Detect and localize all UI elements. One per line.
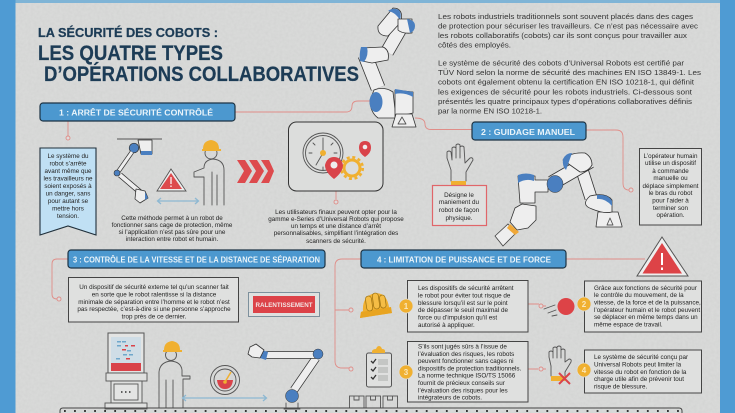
text box: section 2 description	[640, 148, 702, 225]
heading: section 4	[361, 250, 566, 268]
panel: point 3: dispositifs de protection traditionnels.	[418, 365, 522, 372]
icon: large warning triangle	[637, 237, 688, 276]
panel: point 2: 2	[582, 300, 587, 309]
arrow: separation distance	[182, 395, 266, 401]
heading: section 2: 2 : GUIDAGE MANUEL	[481, 128, 575, 137]
callout: physical handling	[432, 186, 486, 226]
text box: section 2 description: utilise un dispositif	[645, 160, 696, 167]
text: section 1 right: Les utilisateurs finaux peuvent opter pour la	[275, 209, 397, 216]
panel: point 4: Le système de sécurité conçu par	[594, 354, 688, 361]
intro text: TÜV Nord selon la norme de sécurité des machines EN ISO 13849-1. Les	[438, 68, 701, 77]
icon: speed gauge	[210, 366, 240, 394]
icon: map pins	[325, 141, 371, 179]
text: section 1 left: interaction entre robot et humain.	[126, 236, 218, 243]
text: section 1 right	[268, 209, 404, 245]
panel: point 2: se déplacer en même temps dans un	[594, 314, 698, 321]
icon: speed robot	[248, 344, 323, 409]
ribbon: section 1 description: Le système du	[48, 153, 89, 160]
intro text: de protection pour sécuriser les travailleurs. Ce n’est pas nécessaire avec	[438, 22, 698, 30]
icon: hand with cuff	[447, 144, 473, 186]
sign: ralentissement: RALENTISSEMENT	[256, 302, 313, 309]
panel: point 3: l’évaluation des risques, les robots	[418, 351, 514, 358]
icon: ceiling robot	[114, 139, 162, 203]
icon: main robot arm	[360, 8, 416, 127]
ribbon: section 1 description: les travailleurs ne	[44, 176, 93, 182]
text box: section 2 description: manuelle ou	[653, 175, 688, 182]
title: LA SÉCURITÉ DES COBOTS :	[38, 25, 218, 40]
panel: point 2: vitesse, de la force et de la puissance,	[594, 300, 701, 306]
text box: section 2 description: L’opérateur humain	[644, 153, 698, 160]
panel: point 1: le robot pour éviter tout risque de	[418, 292, 511, 300]
icon: hand with red cross	[549, 346, 571, 384]
callout: physical handling: maniement du	[439, 199, 479, 206]
intro text: les exigences de sécurité pour les robots industriels. Ci-dessous sont	[438, 88, 692, 96]
arrow: distance worker robot	[158, 198, 198, 204]
heading: section 4: 4 : LIMITATION DE PUISSANCE ET DE FORCE	[377, 256, 552, 264]
text box: section 3 description: minimale de séparation entre l’homme et le robot n’est	[78, 299, 230, 306]
panel: point 3: fournit de précieux conseils sur	[418, 380, 505, 387]
text: section 1 left: fonctionner sans cage de protection, même	[112, 222, 233, 229]
panel: point 4: vitesse du robot en fonction de la	[594, 369, 687, 376]
ribbon: section 1 description: pour autant se	[48, 198, 89, 205]
text box: section 3 description: trop près de ce dernier.	[122, 314, 187, 320]
text: section 1 right: gamme e-Series d’Universal Robots qui propose	[268, 216, 404, 223]
icon: control kiosk	[105, 333, 147, 409]
ribbon: section 1 description: tension.	[57, 213, 79, 220]
callout: physical handling: robot de façon	[439, 207, 480, 214]
intro text: côtés des employés.	[438, 40, 511, 50]
panel: point 2: l’opérateur humain et le robot peuvent	[594, 307, 700, 314]
text: section 1 left	[112, 215, 233, 243]
icon: red ball with speed lines	[544, 298, 574, 316]
intro text	[438, 12, 701, 116]
panel: point 4: charge utile afin de prévenir tout	[594, 376, 684, 383]
heading: section 2	[472, 122, 586, 140]
text: section 1 right: personnalisables, simplifiant l’intégration des	[274, 230, 398, 237]
ribbon: section 1 description: robot s’arrête	[49, 160, 87, 168]
panel: point 3: intégrateurs de cobots.	[418, 395, 482, 402]
title: LES QUATRE TYPES	[38, 42, 223, 65]
conveyor belt	[60, 408, 682, 413]
text: section 1 right: scanners de sécurité.	[306, 238, 366, 245]
panel: point 2: le contrôle du mouvement, de la	[594, 292, 684, 299]
panel: point 1: force ou d’impulsion qu’il est	[418, 314, 497, 322]
text box: section 2 description: à commande	[652, 168, 689, 175]
panel: point 2: Grâce aux fonctions de sécurité pour	[594, 285, 697, 292]
panel: point 3: La norme technique ISO/TS 15066	[418, 373, 516, 380]
panel: point 1	[399, 280, 528, 332]
panel: point 4: risque de blessure.	[594, 384, 647, 390]
icon: warning triangle small	[157, 169, 186, 191]
text box: section 3 description: en sorte que le robot ralentisse si la distance	[92, 292, 217, 298]
panel: point 3	[399, 342, 528, 402]
callout: physical handling: physique.	[446, 215, 473, 222]
heading: section 1: 1 : ARRÊT DE SÉCURITÉ CONTRÔLÉ	[59, 108, 214, 118]
text box: section 3 description	[68, 278, 238, 322]
intro text: cobots ont également obtenu la certification EN ISO 10218-1, qui définit	[438, 78, 694, 86]
panel: point 1: de dépasser le seuil maximal de	[418, 307, 508, 314]
intro text: par la norme EN ISO 10218-1.	[438, 106, 542, 116]
callout: physical handling: Désigne le	[444, 192, 474, 199]
intro text: Les robots industriels traditionnels sont souvent placés dans des cages	[438, 12, 693, 21]
panel: point 3: 3	[404, 368, 409, 377]
text: section 1 left: Cette méthode permet à un robot de	[121, 215, 223, 222]
icon: gear	[341, 157, 363, 179]
panel: point 2: même espace de travail.	[594, 322, 663, 328]
sign: ralentissement	[248, 292, 320, 316]
icon: worker 1	[194, 140, 224, 205]
panel: point 4: Universal Robots peut limiter la	[594, 362, 682, 368]
panel: point 2	[577, 281, 702, 332]
heading: section 3: 3 : CONTRÔLE DE LA VITESSE ET DE LA DISTANCE DE SÉPARATION	[73, 256, 320, 264]
panel: point 3: l’évaluation des risques pour les	[418, 387, 508, 394]
text box: section 3 description: pas respectée, c’est-à-dire si une personne s’approche	[77, 306, 231, 313]
panel: point 1: autorisé à appliquer.	[418, 322, 475, 329]
panel: point 1: blessure lorsqu’il est sur le point	[418, 300, 508, 307]
panel: point 4: 4	[582, 366, 587, 375]
title	[38, 25, 359, 86]
intro text: présentés les quatre principaux types d’opérations collaboratives définis	[438, 97, 692, 106]
text box: section 2 description: déplace simplement	[642, 183, 699, 190]
ribbon: section 1 description: mettre hors	[52, 206, 84, 212]
text box: section 3 description: Un dispositif de sécurité externe tel qu’un scanner fait	[79, 284, 229, 291]
icon: clock	[303, 133, 343, 173]
panel: clock and gear	[288, 122, 383, 191]
panel: point 3: peuvent fonctionner sans cages ni	[418, 358, 514, 365]
chevrons	[237, 160, 274, 183]
text box: section 2 description: terminer son	[653, 205, 688, 212]
panel: point 1: Les dispositifs de sécurité arrêtent	[418, 285, 514, 292]
intro text: les robots collaboratifs (cobots) car ils sont conçus pour travailler aux	[438, 31, 687, 40]
icon: hard hat	[360, 293, 392, 318]
icon: cardboard boxes	[350, 396, 398, 408]
intro text: Le système de sécurité des cobots d’Universal Robots est certifié par	[438, 58, 685, 68]
text box: section 2 description: opération.	[656, 212, 685, 219]
heading: section 3	[68, 250, 325, 268]
title: D’OPÉRATIONS COLLABORATIVES	[44, 63, 359, 86]
panel: point 3: S’ils sont jugés sûrs à l’issue de	[418, 344, 507, 350]
panel: point 1: 1	[404, 302, 409, 311]
icon: checklist clipboard	[366, 346, 392, 387]
ribbon: section 1 description: un danger, sans	[46, 190, 90, 198]
connector lines	[52, 101, 645, 371]
icon: hand-guided robot	[495, 153, 622, 246]
ribbon: section 1 description	[40, 148, 96, 235]
text: section 1 left: si l’application n’est pas sûre pour une	[119, 229, 226, 236]
heading: section 1	[40, 103, 235, 121]
ribbon: section 1 description: avant même que	[45, 168, 92, 175]
panel: point 4	[577, 350, 702, 393]
text box: section 2 description: le bras du robot	[649, 190, 693, 197]
icon: worker 3	[159, 341, 190, 408]
text: section 1 right: un temps et une distance d’arrêt	[291, 223, 381, 230]
text box: section 2 description: pour l’aider à	[652, 198, 689, 204]
ribbon: section 1 description: soient exposés à	[44, 183, 92, 190]
